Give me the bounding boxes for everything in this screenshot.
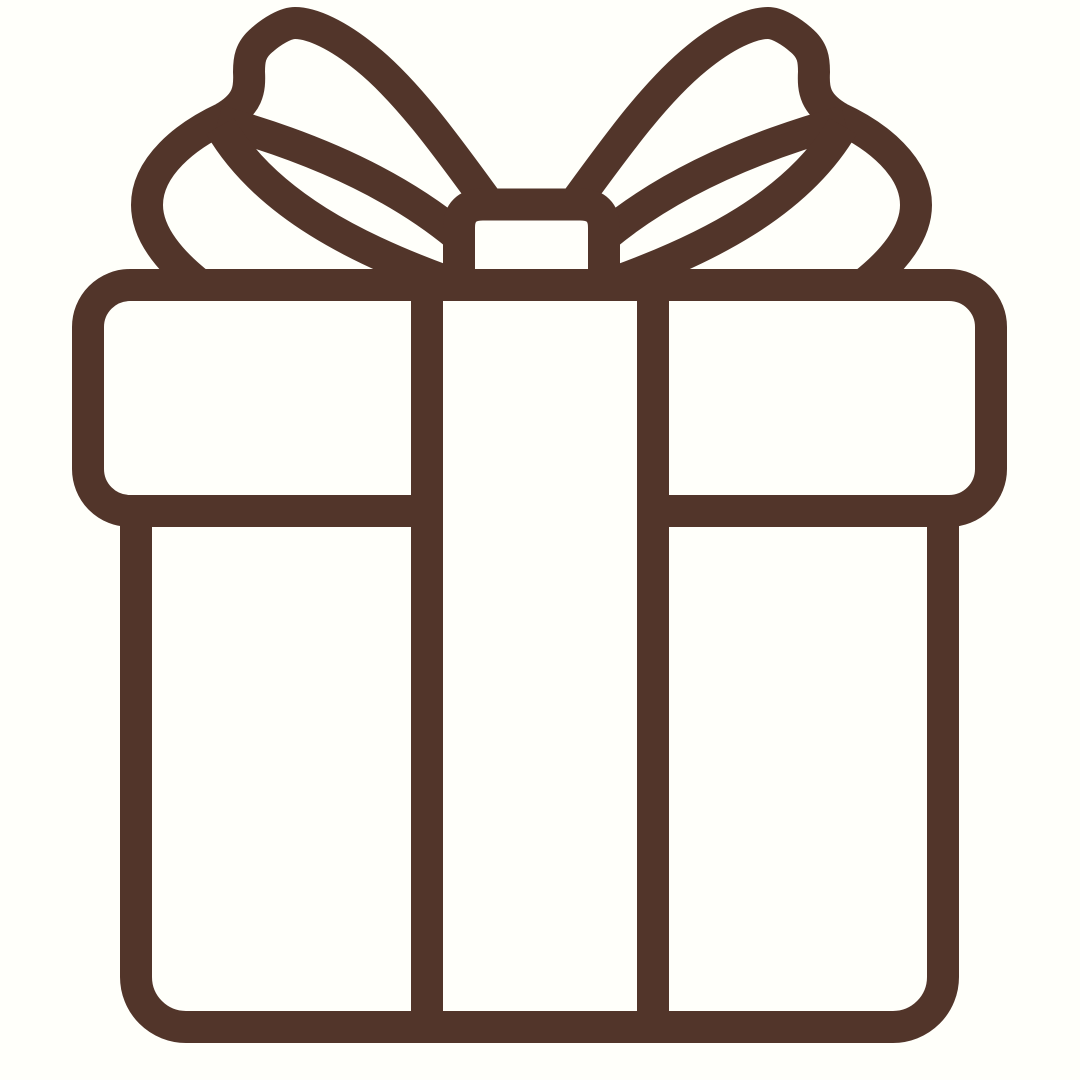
bow: left outer loop <box>147 118 224 285</box>
bow: right upper loop <box>577 23 839 200</box>
ribbon: right vertical band <box>637 285 669 1027</box>
bow: right half <box>577 23 916 285</box>
bow: right ribbon lower edge <box>618 126 843 281</box>
box body <box>136 511 943 1027</box>
box lid <box>88 285 991 511</box>
bow: left ribbon lower edge <box>220 126 445 281</box>
bow: left half <box>147 23 486 285</box>
bow: right outer loop <box>839 118 916 285</box>
bow: center knot <box>459 204 604 285</box>
bow: left ribbon upper edge <box>218 121 458 236</box>
bow: left upper loop <box>224 23 486 200</box>
ribbon: left vertical band <box>411 285 443 1027</box>
bow: right ribbon upper edge <box>605 121 845 236</box>
